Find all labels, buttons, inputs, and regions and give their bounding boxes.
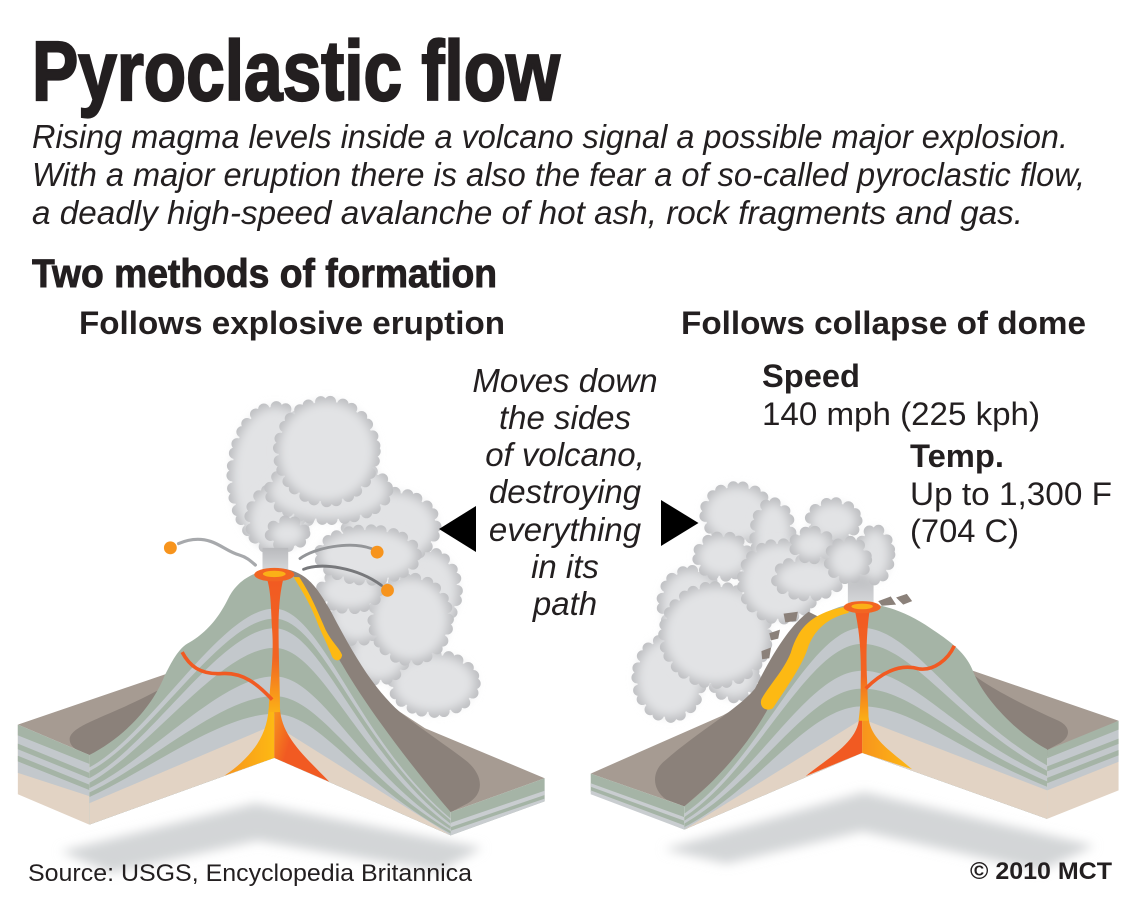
centre description: the sides bbox=[499, 399, 631, 436]
speed stat: 140 mph (225 kph) bbox=[762, 396, 1040, 432]
speed stat: Speed bbox=[762, 358, 860, 394]
temperature stat bbox=[910, 438, 1112, 549]
magma conduit bbox=[266, 576, 284, 712]
centre description: in its bbox=[531, 548, 599, 585]
crater bbox=[844, 601, 881, 613]
lava flow bbox=[761, 606, 849, 710]
centre description: everything bbox=[489, 511, 642, 548]
right arrow bbox=[661, 500, 698, 546]
dark flanks bbox=[70, 691, 164, 755]
magma chamber bbox=[224, 709, 329, 782]
eruption column bbox=[848, 574, 874, 606]
centre description: of volcano, bbox=[485, 436, 645, 473]
source credit: Source: USGS, Encyclopedia Britannica bbox=[28, 860, 473, 887]
intro text: With a major eruption there is also the fear a of so-called pyroclastic flow, bbox=[32, 156, 1085, 193]
centre description: destroying bbox=[489, 473, 642, 510]
ground shadow bbox=[61, 803, 482, 873]
temperature stat: Up to 1,300 F bbox=[910, 476, 1112, 512]
ground surface bbox=[18, 630, 545, 812]
temperature stat: (704 C) bbox=[910, 513, 1019, 549]
left column heading: Follows explosive eruption bbox=[79, 305, 505, 341]
centre description bbox=[472, 362, 658, 622]
subheading: Two methods of formation bbox=[32, 252, 497, 296]
dark flanks bbox=[655, 612, 862, 806]
left block face bbox=[591, 774, 684, 830]
speed stat bbox=[762, 358, 1040, 432]
ground shadow bbox=[664, 792, 1094, 871]
intro text: a deadly high-speed avalanche of hot ash, rock fragments and gas. bbox=[32, 194, 1023, 231]
temperature stat: Temp. bbox=[910, 438, 1004, 474]
left arrow bbox=[439, 506, 476, 552]
centre description: Moves down bbox=[472, 362, 658, 399]
lava flow bbox=[294, 577, 342, 660]
magma conduit bbox=[854, 608, 870, 721]
volcano cross-section strata bbox=[89, 574, 451, 836]
copyright: © 2010 MCT bbox=[970, 858, 1112, 885]
centre description: path bbox=[532, 585, 597, 622]
eruption column bbox=[262, 548, 288, 573]
volcanic bombs bbox=[164, 539, 394, 597]
right column heading: Follows collapse of dome bbox=[681, 305, 1086, 341]
left block face bbox=[18, 725, 89, 825]
ash cloud bbox=[637, 487, 890, 717]
intro text: Rising magma levels inside a volcano signal a possible major explosion. bbox=[32, 118, 1068, 155]
ground surface bbox=[591, 639, 1119, 806]
right block face bbox=[451, 778, 545, 835]
side vent bbox=[866, 646, 954, 689]
side vent bbox=[182, 652, 272, 700]
ash cloud bbox=[232, 401, 475, 712]
title: Pyroclastic flow bbox=[32, 24, 561, 118]
rock debris bbox=[761, 594, 912, 659]
intro text bbox=[32, 118, 1085, 231]
magma chamber bbox=[806, 717, 912, 776]
left volcano illustration bbox=[18, 401, 545, 873]
crater bbox=[254, 568, 294, 581]
right block face bbox=[1047, 721, 1119, 819]
right volcano illustration bbox=[591, 487, 1119, 871]
volcano cross-section strata bbox=[684, 606, 1048, 830]
